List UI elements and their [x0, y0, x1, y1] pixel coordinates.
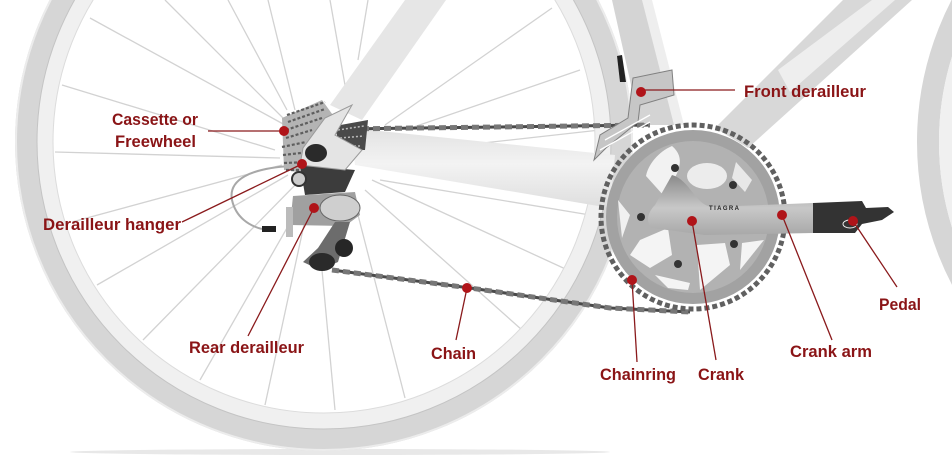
- label: crank: Crank: [698, 366, 745, 384]
- cable: [232, 166, 292, 232]
- label: pedal: Pedal: [879, 296, 921, 314]
- label: front derailleur: Front derailleur: [744, 83, 867, 101]
- chainring: [601, 125, 785, 309]
- rear wheel: [16, 0, 632, 450]
- label: cassette or freewheel: [112, 111, 199, 151]
- front derailleur: [594, 55, 674, 160]
- label: chainring: Chainring: [600, 366, 676, 384]
- label: derailleur hanger: Derailleur hanger: [43, 216, 182, 234]
- label: cassette or freewheel: Freewheel: [115, 133, 196, 151]
- label: cassette or freewheel: Cassette or: [112, 111, 199, 129]
- frame tubes: [330, 0, 912, 208]
- lower chain: [332, 270, 690, 312]
- crank arm: [648, 175, 813, 235]
- dropout: [292, 105, 362, 186]
- callout dots: [279, 87, 858, 293]
- spokes: [55, 0, 600, 410]
- label: crank arm: Crank arm: [790, 343, 872, 361]
- label: rear derailleur: Rear derailleur: [189, 339, 305, 357]
- upper chain: [340, 125, 650, 129]
- rear derailleur: [286, 192, 360, 271]
- callout lines: [182, 90, 897, 362]
- ground shadow: [70, 449, 610, 455]
- crank arm: TIAGRA: [709, 206, 740, 212]
- label: chain: Chain: [431, 345, 476, 363]
- front wheel edge: [928, 0, 952, 440]
- pedal: [813, 201, 894, 233]
- cassette: [282, 100, 368, 195]
